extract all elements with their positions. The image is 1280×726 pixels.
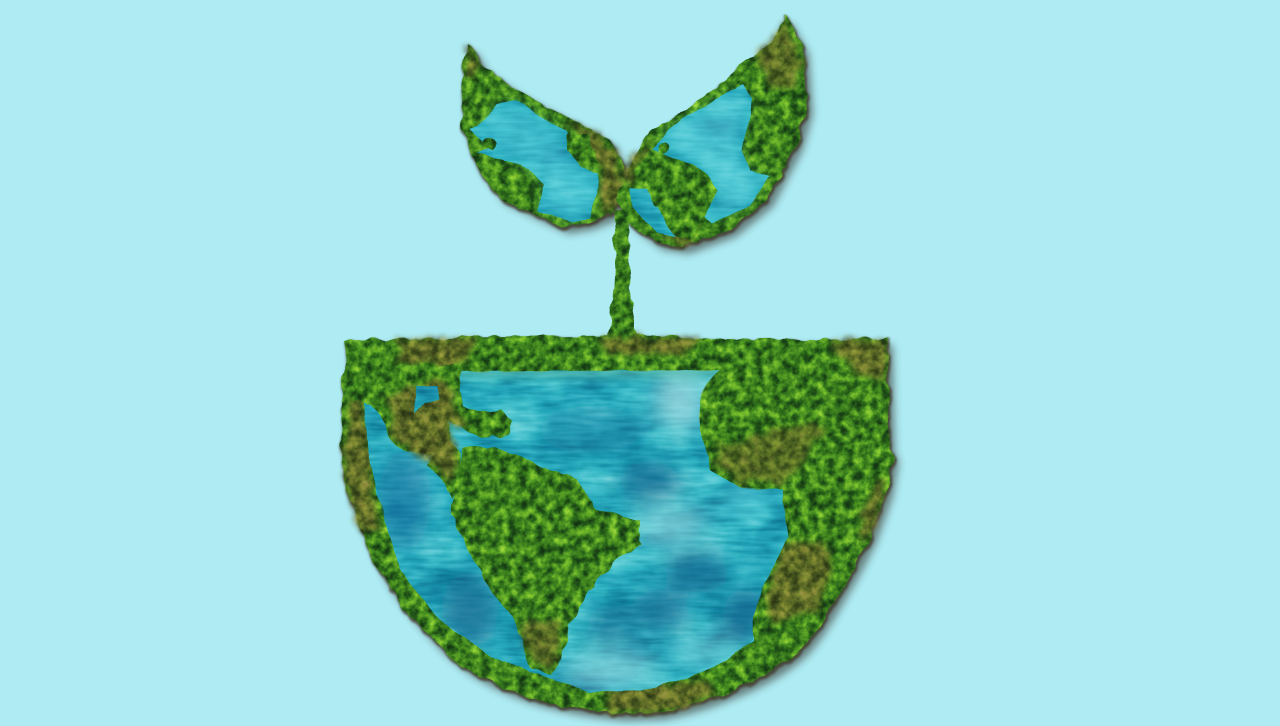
mist at top of ocean xyxy=(455,364,725,376)
leaf land masses xyxy=(567,133,718,240)
south america xyxy=(452,447,642,674)
plant stem xyxy=(608,212,637,336)
left leaf water xyxy=(470,100,598,222)
illustration: earth bowl with sprout xyxy=(338,14,904,726)
right leaf water xyxy=(652,85,770,223)
left leaf olive patches xyxy=(468,48,622,216)
right leaf xyxy=(616,15,807,247)
bowl: land border xyxy=(341,335,893,714)
dark outline under land xyxy=(342,17,894,716)
pond xyxy=(413,385,440,413)
bowl: ocean xyxy=(350,364,788,692)
left leaf lightening xyxy=(485,104,594,218)
right leaf lower water xyxy=(630,187,677,237)
lower right olive patch xyxy=(762,540,835,625)
right leaf land xyxy=(635,150,718,240)
olive land over central america xyxy=(385,378,470,485)
ocean dark and pale currents xyxy=(379,368,771,690)
north-west land and central america xyxy=(350,365,511,500)
left leaf island xyxy=(484,137,496,149)
right leaf olive patches xyxy=(622,20,800,242)
right leaf island xyxy=(659,143,669,153)
mid right rock patch xyxy=(715,425,825,482)
rim olive and rock patches xyxy=(345,338,889,714)
left leaf upper land xyxy=(567,133,600,167)
south america olive tip xyxy=(522,620,562,668)
left leaf xyxy=(460,44,625,227)
right leaf lightening xyxy=(662,92,762,217)
drop shadows xyxy=(347,22,899,721)
